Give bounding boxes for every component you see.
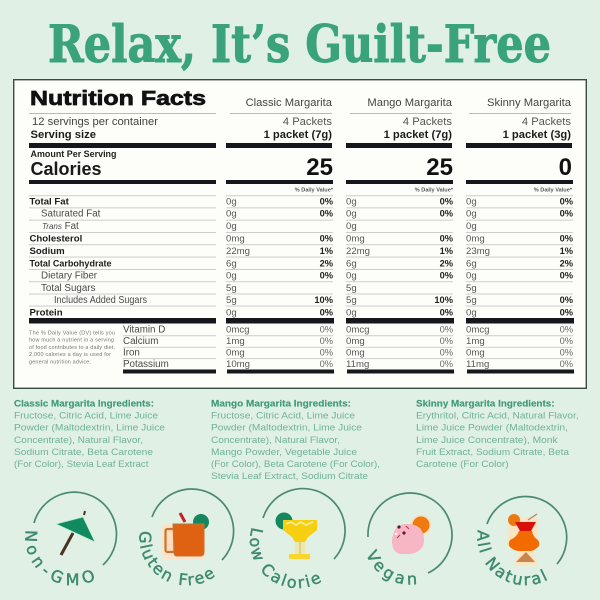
values: Skinny Margarita: 6g (466, 258, 477, 269)
values: Mango Margarita: 0% (440, 307, 454, 317)
badge: Non-GMO (25, 491, 118, 586)
column header: Classic Margarita: Classic Margarita (246, 97, 333, 109)
ingredients: Mango Margarita: (For Color), Beta Carotene (For Color), (211, 459, 380, 470)
labels column header (29, 113, 216, 184)
values: Skinny Margarita: 0g (466, 307, 477, 318)
ingredients: Classic Margarita: Concentrate), Natural Flavor, (14, 435, 143, 446)
values: Mango Margarita: 0mg (346, 234, 365, 245)
labels column header: Serving size (30, 129, 96, 141)
values: Skinny Margarita: 0% (560, 307, 574, 317)
column header: Skinny Margarita (466, 97, 573, 194)
daily value footnote: of food contributes to a daily diet. (29, 345, 115, 351)
values: Skinny Margarita: 0% (560, 295, 574, 305)
values: Skinny Margarita: 0g (466, 271, 477, 282)
values: Skinny Margarita: 0mg (466, 234, 485, 245)
values: Classic Margarita: 0% (320, 336, 333, 346)
values: Skinny Margarita: 0g (466, 196, 477, 207)
values: Mango Margarita: 0mg (346, 348, 365, 359)
ingredients: Mango Margarita: Powder (Maltodextrin, Lime Juice (211, 423, 362, 434)
daily value footnote: The % Daily Value (DV) tells you (29, 330, 115, 336)
badge: Vegan (367, 492, 453, 585)
values: Classic Margarita: 0mcg (226, 325, 249, 336)
column header: Skinny Margarita: Skinny Margarita (487, 97, 572, 109)
column header: Skinny Margarita: 0 (559, 154, 572, 181)
values: Skinny Margarita: 0% (560, 234, 574, 244)
values: Classic Margarita: 0% (320, 348, 333, 358)
values: Classic Margarita: 1% (320, 246, 334, 256)
values: Mango Margarita (346, 196, 454, 370)
values: Mango Margarita: 22mg (346, 246, 370, 257)
badge: Vegan: Vegan (368, 548, 416, 585)
column header: Classic Margarita: 1 packet (7g) (264, 129, 332, 141)
values: Mango Margarita: 0g (346, 209, 357, 220)
values: Mango Margarita: 2% (440, 258, 454, 268)
badge: Gluten Free: Gluten Free (139, 532, 215, 586)
values: Classic Margarita: 1mg (226, 336, 245, 347)
badge: All Natural (477, 496, 568, 586)
values: Classic Margarita: 0% (320, 359, 333, 369)
values: Skinny Margarita: 5g (466, 283, 477, 294)
values: Classic Margarita: 2% (320, 258, 334, 268)
values: Skinny Margarita (466, 196, 574, 370)
nutrient row labels: Total Sugars (41, 283, 96, 294)
icon: cocktail umbrella (56, 511, 95, 555)
values: Skinny Margarita: 0% (560, 196, 574, 206)
values: Mango Margarita: 0% (440, 209, 454, 219)
values: Skinny Margarita: 1mg (466, 336, 485, 347)
ingredients: Mango Margarita: Mango Powder, Vegetable Juice (211, 447, 357, 458)
values: Mango Margarita: 5g (346, 295, 357, 306)
ingredients: Mango Margarita (211, 398, 380, 482)
values: Skinny Margarita: 0% (560, 348, 573, 358)
values: Classic Margarita: 10% (314, 295, 334, 305)
column header: Classic Margarita: 4 Packets (283, 116, 332, 128)
column header: Mango Margarita: Mango Margarita (367, 97, 453, 109)
labels column header: Amount Per Serving (30, 149, 116, 159)
values: Classic Margarita (226, 196, 334, 370)
ingredients: Classic Margarita: Powder (Maltodextrin, Lime Juice (14, 423, 165, 434)
values: Skinny Margarita: 0% (560, 271, 574, 281)
values: Classic Margarita: 0mg (226, 234, 245, 245)
ingredients: Skinny Margarita: Lime Juice Powder (Maltodextrin, (416, 423, 568, 434)
values: Skinny Margarita: 0g (466, 209, 477, 220)
column header: Mango Margarita: 25 (426, 154, 453, 181)
badge: Gluten Free (139, 488, 234, 586)
values: Classic Margarita: 0g (226, 307, 237, 318)
ingredients: Classic Margarita: (For Color), Stevia Leaf Extract (14, 459, 149, 470)
nutrient row labels: Includes Added Sugars (54, 295, 147, 306)
values: Classic Margarita: 6g (226, 258, 237, 269)
ingredients: Classic Margarita: Fructose, Citric Acid, Lime Juice (14, 411, 158, 422)
panel: nutrition facts table (14, 80, 586, 388)
values: Skinny Margarita: 0% (560, 359, 573, 369)
badge: Low Calorie (250, 488, 346, 588)
values: Mango Margarita: 6g (346, 258, 357, 269)
nutrient row labels: Dietary Fiber (41, 271, 98, 282)
ingredients: Classic Margarita: Sodium Citrate, Beta Carotene (14, 447, 153, 458)
column header: Classic Margarita: % Daily Value* (295, 188, 334, 194)
nutrient row labels: Potassium (123, 359, 169, 370)
nutrient row labels: Vitamin D (123, 325, 165, 336)
values: Mango Margarita: 0g (346, 271, 357, 282)
values: Mango Margarita: 0% (440, 359, 453, 369)
values: Skinny Margarita: 0g (466, 221, 477, 232)
ingredients: Skinny Margarita: Carotene (For Color) (416, 459, 509, 470)
labels column header: 12 servings per container (32, 116, 158, 128)
column header: Skinny Margarita: 1 packet (3g) (503, 129, 571, 141)
daily value footnote: 2,000 calories a day is used for (29, 352, 111, 358)
values: Classic Margarita: 0g (226, 209, 237, 220)
values: Mango Margarita: 0mg (346, 336, 365, 347)
values: Mango Margarita: 10% (434, 295, 454, 305)
values: Classic Margarita: 0% (320, 325, 333, 335)
values: Classic Margarita: 5g (226, 283, 237, 294)
icon: orange cocktail (507, 514, 539, 565)
values: Skinny Margarita: 11mg (466, 359, 489, 370)
values: Skinny Margarita: 1% (560, 246, 574, 256)
daily value footnote: how much a nutrient in a serving (29, 338, 114, 344)
values: Mango Margarita: 0g (346, 196, 357, 207)
values: Mango Margarita: 1% (440, 246, 454, 256)
values: Mango Margarita: 0g (346, 307, 357, 318)
values: Classic Margarita: 0% (320, 307, 334, 317)
ingredients: Mango Margarita: Stevia Leaf Extract, Sodium Citrate (211, 471, 368, 482)
values: Skinny Margarita: 0% (560, 325, 573, 335)
ingredients: Skinny Margarita: Erythritol, Citric Acid, Natural Flavor, (416, 411, 579, 422)
values: Mango Margarita: 0mcg (346, 325, 369, 336)
nutrient row labels: Total Carbohydrate (30, 258, 112, 269)
daily value footnote (29, 330, 115, 365)
nutrient row labels: Cholesterol (30, 234, 82, 245)
badge: Low Calorie: Low Calorie (250, 528, 322, 588)
ingredients: Mango Margarita: Fructose, Citric Acid, Lime Juice (211, 411, 355, 422)
values: Skinny Margarita: 0% (560, 336, 573, 346)
ingredients: Mango Margarita: Mango Margarita Ingredients: (211, 398, 351, 410)
ingredients: Classic Margarita: Classic Margarita Ingredients: (14, 398, 154, 410)
values: Classic Margarita: 0mg (226, 348, 245, 359)
values: Mango Margarita: 0g (346, 221, 357, 232)
labels column header: Calories (30, 159, 102, 179)
ingredients: Skinny Margarita (416, 398, 579, 470)
badge: All Natural: All Natural (477, 530, 548, 586)
nutrient row labels: Sodium (30, 246, 65, 257)
values: Classic Margarita: 0% (320, 209, 334, 219)
nutrient row labels (30, 196, 169, 370)
ingredients: Classic Margarita (14, 398, 165, 470)
values: Classic Margarita: 0% (320, 196, 334, 206)
values: Mango Margarita: 0% (440, 271, 454, 281)
icon: margarita glass (276, 512, 317, 559)
values: Classic Margarita: 22mg (226, 246, 250, 257)
values: Skinny Margarita: 0mg (466, 348, 485, 359)
nutrient row labels: Iron (123, 348, 140, 359)
heavy divider bars (29, 318, 574, 374)
values: Mango Margarita: 0% (440, 325, 453, 335)
column header: Mango Margarita: 4 Packets (403, 116, 452, 128)
nutrient row labels: Trans Fat (42, 221, 79, 232)
badge: Non-GMO: Non-GMO (25, 531, 94, 586)
values: Mango Margarita: 0% (440, 348, 453, 358)
icon: pink drink (392, 515, 431, 554)
values: Skinny Margarita: 0% (560, 209, 574, 219)
column header: Classic Margarita: 25 (306, 154, 333, 181)
daily value footnote: general nutrition advice. (29, 359, 91, 365)
values: Classic Margarita: 0g (226, 221, 237, 232)
values: Classic Margarita: 10mg (226, 359, 250, 370)
column header: Skinny Margarita: % Daily Value* (534, 188, 573, 194)
values: Mango Margarita: 0% (440, 336, 453, 346)
values: Classic Margarita: 5g (226, 295, 237, 306)
values: Skinny Margarita: 2% (560, 258, 574, 268)
ingredients: Skinny Margarita: Skinny Margarita Ingredients: (416, 398, 554, 410)
column header: Skinny Margarita: 4 Packets (522, 116, 571, 128)
values: Classic Margarita: 0g (226, 271, 237, 282)
values: Classic Margarita: 0% (320, 234, 334, 244)
column header: Mango Margarita (346, 97, 454, 194)
ingredients: Skinny Margarita: Fruit Extract, Sodium Citrate, Beta (416, 447, 570, 458)
ingredients: Mango Margarita: Concentrate), Natural Flavor, (211, 435, 340, 446)
nutrient row labels: Calcium (123, 336, 158, 347)
column header: Mango Margarita: 1 packet (7g) (384, 129, 452, 141)
values: Skinny Margarita: 5g (466, 295, 477, 306)
icon: copper mug (162, 513, 209, 559)
values: Mango Margarita: 11mg (346, 359, 369, 370)
values: Skinny Margarita: 0mcg (466, 325, 489, 336)
nutrient row labels: Protein (30, 307, 63, 318)
values: Mango Margarita: 5g (346, 283, 357, 294)
values: Mango Margarita: 0% (440, 196, 454, 206)
nutrient row labels: Saturated Fat (41, 209, 101, 220)
column header: Mango Margarita: % Daily Value* (415, 188, 454, 194)
heading: Nutrition Facts: Nutrition Facts (30, 88, 206, 110)
values: Classic Margarita: 0g (226, 196, 237, 207)
ingredients: Skinny Margarita: Lime Juice Concentrate), Monk (416, 435, 558, 446)
values: Classic Margarita: 0% (320, 271, 334, 281)
values: Skinny Margarita: 23mg (466, 246, 490, 257)
column header: Classic Margarita (226, 97, 334, 194)
values: Mango Margarita: 0% (440, 234, 454, 244)
nutrient row labels: Total Fat (30, 196, 70, 207)
